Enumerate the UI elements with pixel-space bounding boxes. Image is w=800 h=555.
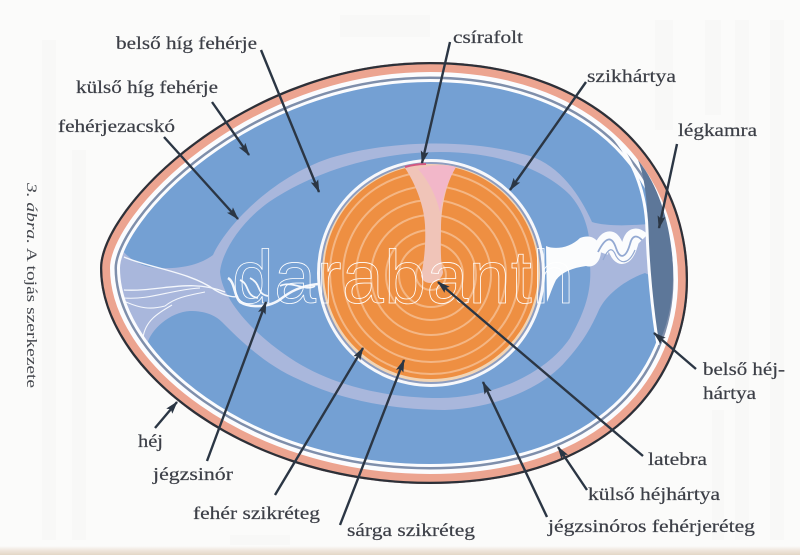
label: latebra: latebra	[648, 449, 707, 469]
inner shell membrane at air chamber	[610, 133, 658, 345]
arrow: jégzsinór	[207, 302, 266, 461]
arrow: külső héjhártya	[558, 447, 587, 490]
label: jégzsinór: jégzsinór	[152, 464, 233, 484]
left chalaza	[124, 257, 318, 338]
label: belső héjhártya	[703, 359, 785, 403]
arrow: latebra	[438, 282, 643, 456]
panel: egg interior	[120, 62, 688, 484]
label: fehérjezacskó: fehérjezacskó	[58, 116, 175, 136]
air chamber	[638, 160, 673, 345]
latebra	[405, 164, 456, 283]
label: belső héjhártya: hártya	[703, 383, 756, 403]
arrow: belső híg fehérje	[261, 50, 319, 192]
label: belső héjhártya: belső héj-	[703, 359, 785, 379]
label: sárga szikréteg: sárga szikréteg	[347, 520, 475, 540]
label: külső héjhártya: külső héjhártya	[588, 484, 720, 504]
outer thin albumen upper lobe	[110, 60, 650, 268]
label: héj: héj	[138, 431, 163, 451]
right chalaza	[546, 237, 642, 302]
outer thin albumen lower lobe	[120, 273, 700, 500]
arrow: csírafolt	[422, 42, 450, 163]
yolk	[317, 159, 545, 387]
diagram: egg cross-section	[90, 50, 700, 500]
arrow: jégzsinóros fehérjeréteg	[483, 382, 547, 517]
egg layers: shell and membranes	[100, 62, 688, 484]
arrow: belső héjhártya	[654, 333, 696, 369]
caption: 3. ábra. A tojás szerkezete	[23, 182, 39, 388]
watermark: darabanth	[232, 235, 574, 319]
label: szikhártya: szikhártya	[587, 66, 676, 86]
arrow: szikhártya	[510, 82, 586, 190]
arrow: külső híg fehérje	[212, 102, 249, 155]
label: légkamra: légkamra	[678, 120, 757, 140]
label: belső híg fehérje: belső híg fehérje	[116, 33, 257, 53]
arrow: sárga szikréteg	[340, 360, 404, 525]
arrow: fehérjezacskó	[164, 137, 238, 219]
arrow: fehér szikréteg	[275, 348, 363, 495]
arrow: héj	[155, 402, 177, 428]
label: jégzsinóros fehérjeréteg: jégzsinóros fehérjeréteg	[547, 516, 755, 536]
inner thin albumen	[220, 152, 590, 398]
label: fehér szikréteg: fehér szikréteg	[193, 503, 320, 523]
arrow: légkamra	[659, 144, 677, 228]
label: külső híg fehérje: külső híg fehérje	[76, 77, 218, 97]
label: csírafolt: csírafolt	[453, 27, 523, 47]
